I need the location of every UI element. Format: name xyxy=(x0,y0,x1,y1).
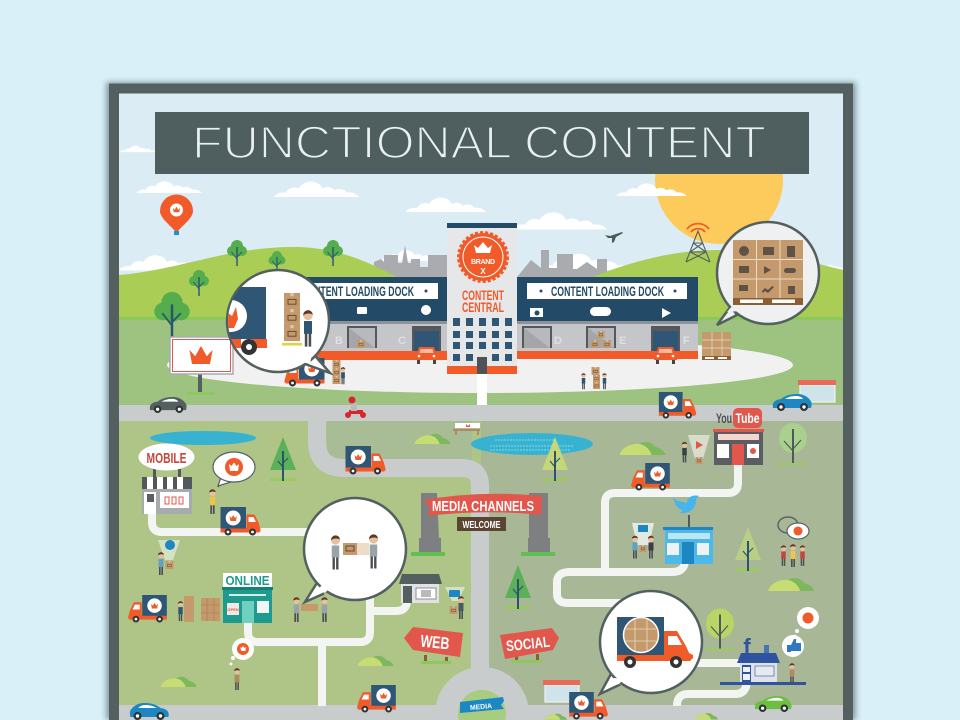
social sign: SOCIAL xyxy=(505,634,551,655)
top road xyxy=(119,405,843,421)
truck: apron left xyxy=(284,358,324,386)
banner left: CONTENT LOADING DOCK xyxy=(301,283,414,299)
grey connector road xyxy=(317,415,480,670)
plane xyxy=(605,232,623,243)
roundabout island: MEDIA xyxy=(470,703,492,712)
online store: OPEN xyxy=(227,607,239,612)
mobile store: MOBILE xyxy=(146,450,186,467)
worker with boxes xyxy=(178,596,220,622)
truck: bottom road centre xyxy=(357,685,396,713)
right warehouse xyxy=(517,277,698,359)
online store: ONLINE xyxy=(226,573,270,588)
brand badge xyxy=(459,233,507,281)
building name: CENTRAL xyxy=(462,299,504,315)
youtube store: Tube xyxy=(736,410,760,426)
bench sign xyxy=(453,423,480,435)
youtube store xyxy=(713,408,764,465)
city skyline xyxy=(374,246,607,277)
sun xyxy=(655,174,783,244)
car: green xyxy=(755,696,792,712)
person with envelope beam xyxy=(445,587,465,619)
map ground xyxy=(119,421,481,720)
building: content central xyxy=(447,223,517,374)
ponds xyxy=(150,431,593,455)
truck: left of online store xyxy=(128,595,167,623)
workers and boxes on apron xyxy=(581,367,607,389)
car: grey xyxy=(150,397,187,413)
twitter store xyxy=(663,495,713,564)
brand badge: X xyxy=(480,267,486,276)
sky xyxy=(119,94,843,277)
roundabout island xyxy=(458,690,506,720)
radio tower xyxy=(686,224,710,262)
truck: bottom right xyxy=(569,692,608,720)
scooter rider xyxy=(345,396,366,418)
bubble: truck delivering xyxy=(600,591,702,694)
icon: orange car right xyxy=(654,347,677,364)
two women with beam xyxy=(632,523,654,558)
social sign xyxy=(500,628,559,663)
building name xyxy=(462,290,504,312)
pallet by dock xyxy=(702,332,731,360)
banner right: CONTENT LOADING DOCK xyxy=(551,283,664,299)
group with speech bubbles xyxy=(778,517,809,567)
box stack with worker xyxy=(332,360,345,384)
brand badge: BRAND xyxy=(471,259,495,266)
left warehouse: C xyxy=(398,335,406,347)
truck: path near youtube xyxy=(631,463,670,491)
left hill xyxy=(119,247,397,317)
right warehouse: E xyxy=(619,335,626,347)
right warehouse: F xyxy=(683,335,690,347)
truck: top road right xyxy=(659,392,696,419)
online store xyxy=(222,573,273,623)
bottom road xyxy=(119,705,843,720)
facebook house xyxy=(720,634,806,685)
bubble: truck and worker xyxy=(215,270,330,373)
people handing box xyxy=(293,597,328,622)
building name: CONTENT xyxy=(462,287,504,303)
title: FUNCTIONAL CONTENT xyxy=(192,117,766,168)
white path from building xyxy=(477,372,487,406)
left warehouse xyxy=(295,277,447,360)
poster illustration xyxy=(119,93,844,720)
white paths xyxy=(152,464,747,706)
title xyxy=(155,112,809,174)
media channels gate: MEDIA CHANNELS xyxy=(432,498,534,515)
windows xyxy=(453,318,512,361)
trees on hill xyxy=(154,240,343,338)
person with video beam xyxy=(682,435,710,464)
banner right xyxy=(527,283,687,299)
clouds xyxy=(119,146,844,270)
media channels gate xyxy=(411,493,555,556)
media channels gate: WELCOME xyxy=(462,520,501,531)
roundabout xyxy=(436,668,528,705)
truck: upper connector xyxy=(346,446,386,474)
car: blue top xyxy=(773,394,812,411)
trees xyxy=(270,423,807,650)
billboard xyxy=(170,337,233,395)
lower field xyxy=(119,320,843,406)
car: blue bottom left xyxy=(130,703,169,720)
bus shelter xyxy=(798,380,836,402)
mobile store xyxy=(138,444,194,514)
right hill xyxy=(590,250,843,318)
truck: mobile road xyxy=(220,507,260,536)
apron xyxy=(167,345,793,393)
balloon xyxy=(160,194,193,235)
mounds xyxy=(160,434,814,720)
icon: orange car left xyxy=(417,347,436,364)
facebook thought bubbles xyxy=(782,607,819,684)
web sign: WEB xyxy=(420,632,450,653)
facebook house: f xyxy=(743,634,751,659)
youtube store: You xyxy=(716,410,732,426)
bubble: handover xyxy=(304,498,406,602)
poster frame xyxy=(114,88,848,720)
left warehouse: B xyxy=(335,335,343,347)
right warehouse: D xyxy=(554,335,562,347)
field strip xyxy=(119,317,843,320)
bubble: pallet of content xyxy=(717,222,819,325)
woman xyxy=(209,489,216,514)
person with content beam xyxy=(158,540,180,575)
crown speech bubble xyxy=(213,452,255,487)
small house xyxy=(399,574,442,603)
web sign xyxy=(404,627,463,664)
bottom shelter xyxy=(543,680,580,702)
thought bubble with person xyxy=(230,638,254,690)
